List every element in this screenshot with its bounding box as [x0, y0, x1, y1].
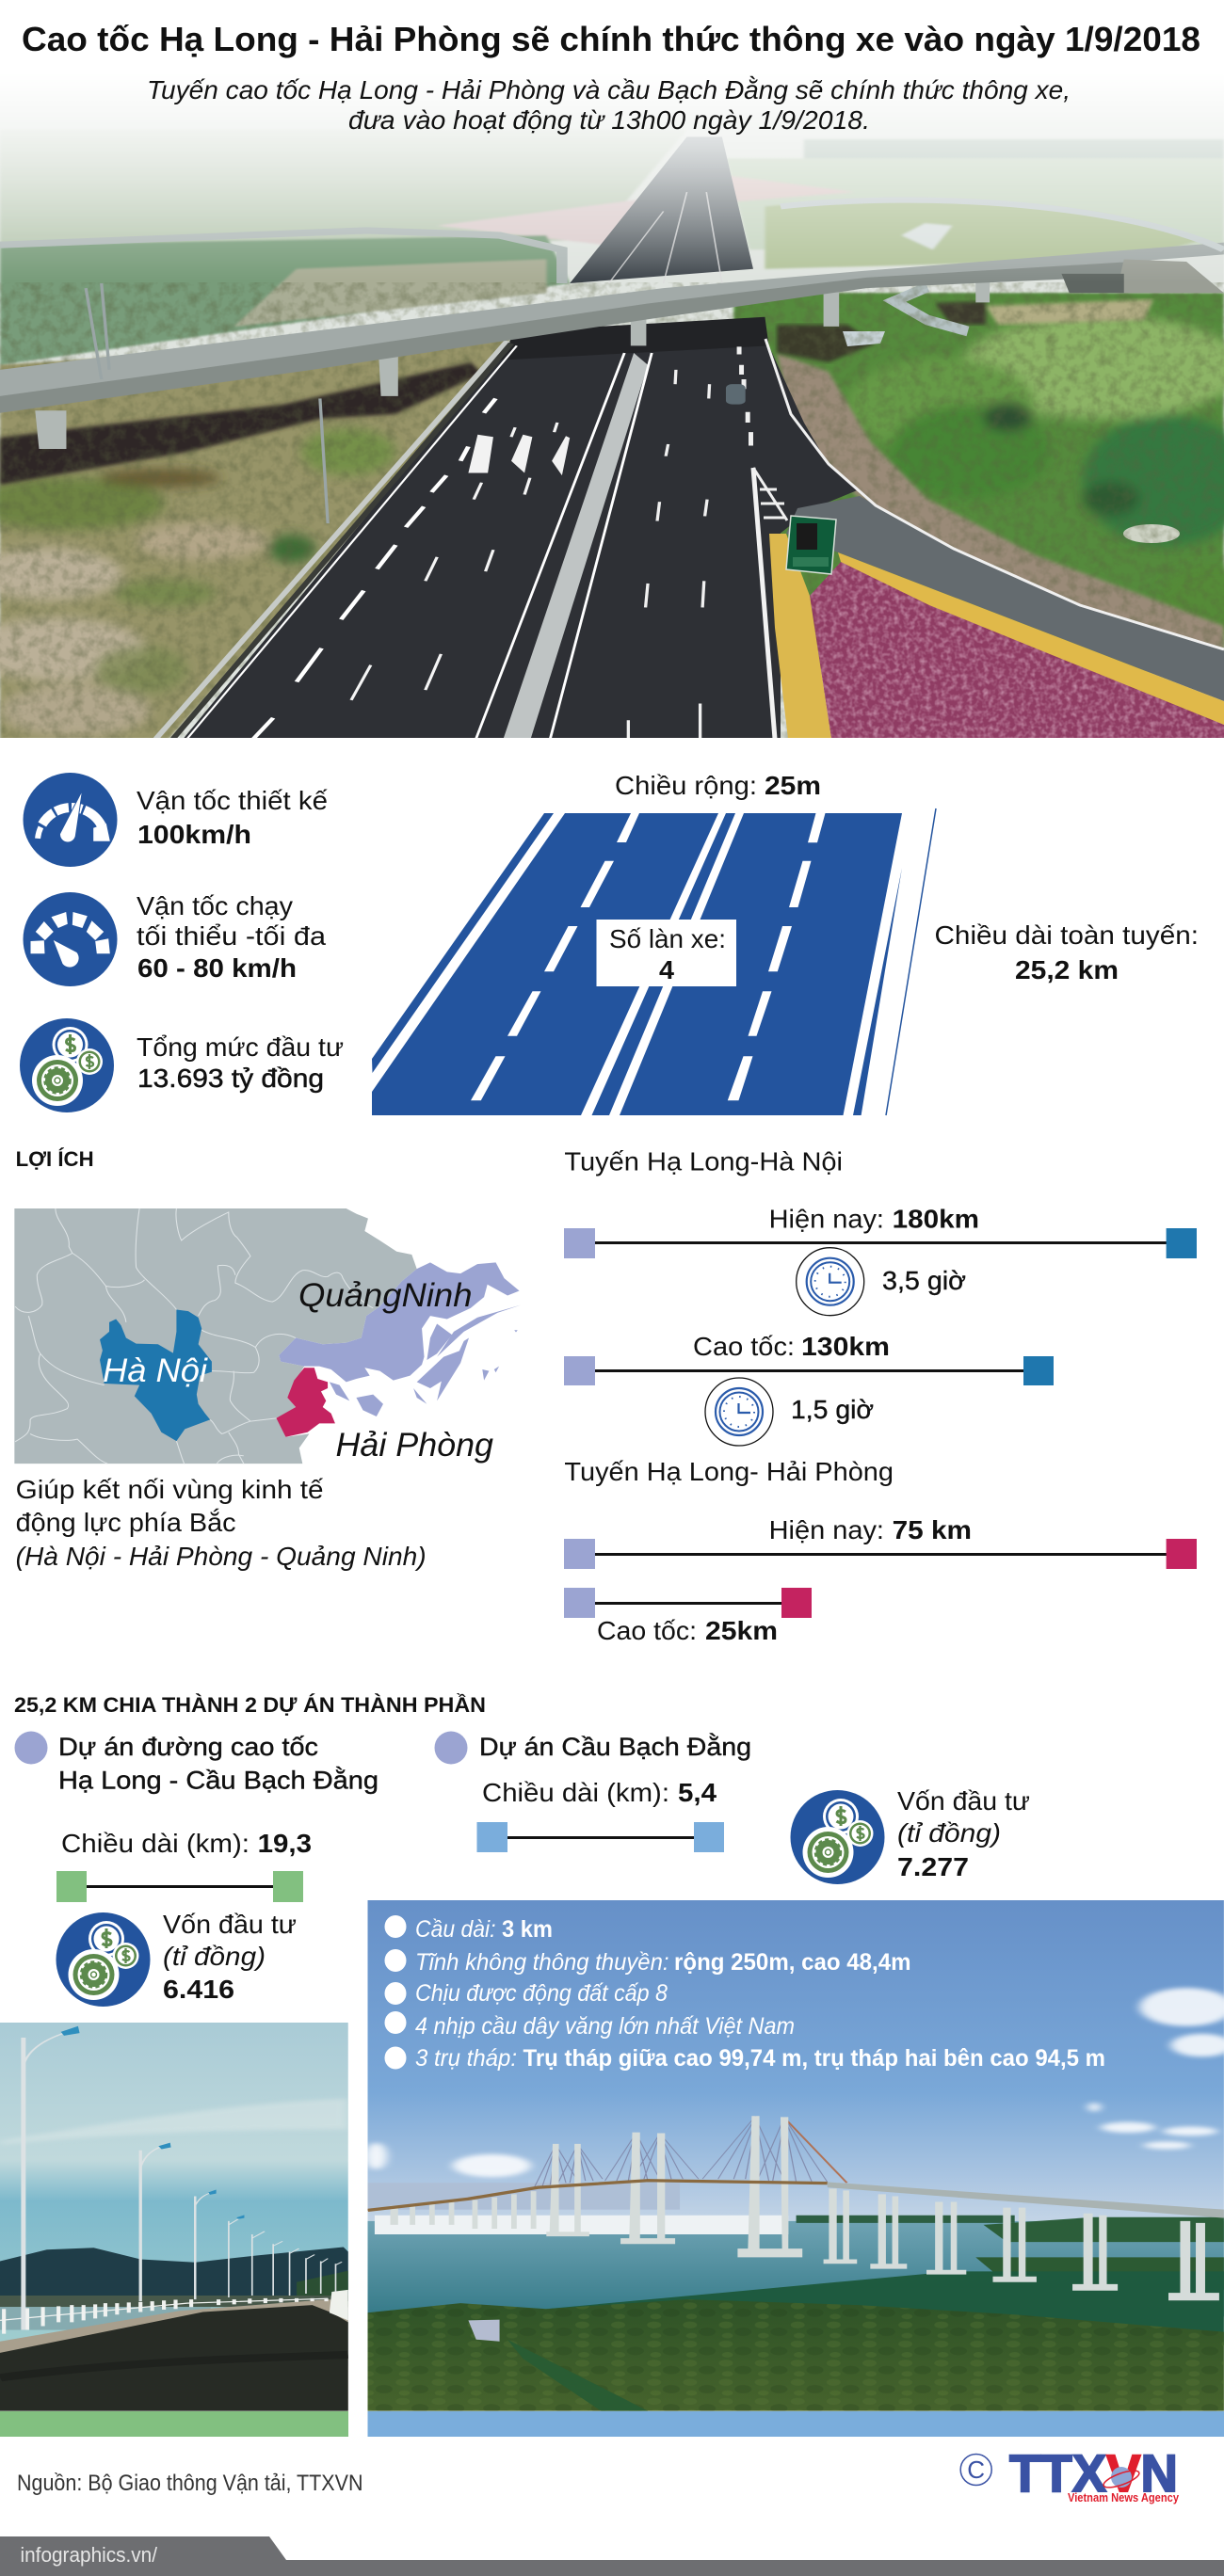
text: operating speed	[137, 891, 326, 983]
distance bar: expressway 130km	[564, 1332, 1054, 1385]
heading: Ha Long - Hai Phong route: Tuyến Hạ Long- Hải Phòng	[564, 1457, 894, 1486]
road width label: 25m	[765, 771, 821, 800]
label: total length: 25,2 km	[1015, 955, 1119, 984]
label: number of lanes: Số làn xe:	[609, 924, 726, 953]
project heading: expressway	[15, 1732, 378, 1795]
project heading: Bach Dang bridge: Dự án Cầu Bạch Đằng	[479, 1732, 751, 1761]
icon: clock 3.5 hours	[797, 1248, 864, 1316]
text: expressway investment	[163, 1910, 297, 2004]
ground colour patches	[0, 282, 1224, 738]
text: operating speed: Vận tốc chạy	[137, 891, 293, 920]
hero photo: highway interchange	[0, 113, 1224, 738]
heading: benefits: LỢI ÍCH	[16, 1147, 94, 1171]
map: northern economic region: Hải Phòng	[335, 1427, 494, 1464]
subtitle: Tuyến cao tốc Hạ Long - Hải Phòng và cầu Bạch Đằng sẽ chính thức thông xe,	[147, 75, 1071, 104]
text: regional connection: Giúp kết nối vùng kinh tế	[16, 1475, 324, 1504]
text: operating speed: tối thiểu -tối đa	[137, 921, 326, 951]
bridge length: Chiều dài (km):	[482, 1778, 669, 1807]
logo: TTXVN: Vietnam News Agency	[1068, 2490, 1180, 2504]
icon: clock 1.5 hours	[705, 1378, 773, 1446]
text: expressway investment: Vốn đầu tư	[163, 1910, 297, 1939]
project heading: Bach Dang bridge	[435, 1732, 751, 1764]
distance bar: expressway 130km: Cao tốc:	[693, 1332, 795, 1361]
project heading: expressway: Dự án đường cao tốc	[58, 1733, 318, 1761]
text: regional connection: động lực phía Bắc	[16, 1508, 236, 1537]
bridge facts list: Tĩnh không thông thuyền:	[415, 1949, 668, 1976]
expressway length	[56, 1829, 312, 1902]
source note: Nguồn: Bộ Giao thông Vận tải, TTXVN	[17, 2471, 363, 2496]
heading: two sub projects: 25,2 KM CHIA THÀNH 2 DỰ ÁN THÀNH PHẦN	[14, 1693, 486, 1717]
bridge facts list: 3 km	[502, 1916, 553, 1943]
photo: expressway with street lamps	[0, 2023, 348, 2411]
bridge facts list	[384, 1915, 1105, 2072]
bridge length	[476, 1778, 724, 1852]
text: bridge investment: 7.277	[897, 1852, 969, 1881]
text: expressway investment: 6.416	[163, 1975, 234, 2004]
icon: bridge investment	[791, 1790, 885, 1884]
logo: TTXVN: TTXVN	[1009, 2443, 1178, 2503]
distance bar: current 75 km: Hiện nay:	[769, 1515, 884, 1544]
icon: speedometer design speed	[23, 773, 117, 867]
map: northern economic region: Hà Nội	[103, 1352, 208, 1389]
icon: speedometer min max speed	[23, 892, 117, 986]
icon: expressway investment	[56, 1912, 151, 2007]
footer bar	[0, 2536, 1224, 2576]
road width label: Chiều rộng:	[615, 771, 757, 800]
text: regional connection	[16, 1475, 427, 1571]
text: design speed	[137, 786, 328, 849]
text: total investment: 13.693 tỷ đồng	[137, 1064, 324, 1093]
bridge facts list: Cầu dài:	[415, 1916, 495, 1943]
text: bridge investment: (tỉ đồng)	[897, 1818, 1001, 1848]
photo: Bach Dang bridge	[365, 1900, 1224, 2411]
distance bar: current 180km: 180km	[893, 1205, 979, 1233]
bridge facts list: Chịu được động đất cấp 8	[415, 1980, 668, 2007]
text: 1.5 hours: 1,5 giờ	[791, 1395, 874, 1424]
title: Cao tốc Hạ Long - Hải Phòng sẽ chính thức thông xe vào ngày 1/9/2018	[22, 20, 1200, 58]
road diagram	[372, 808, 936, 1115]
map: northern economic region	[14, 1208, 521, 1464]
bridge facts list: 3 trụ tháp:	[415, 2045, 517, 2072]
text: design speed: 100km/h	[137, 820, 251, 849]
subtitle	[147, 75, 1071, 135]
expressway length: 19,3	[258, 1829, 312, 1858]
text: total investment: Tổng mức đầu tư	[137, 1032, 344, 1062]
bridge facts list: 4 nhịp cầu dây văng lớn nhất Việt Nam	[415, 2013, 795, 2040]
distance bar: expressway 25km: Cao tốc:	[597, 1616, 697, 1645]
distance bar: expressway 130km: 130km	[801, 1332, 890, 1361]
heading: Ha Long - Ha Noi route: Tuyến Hạ Long-Hà Nội	[564, 1146, 843, 1176]
logo: TTXVN: C	[967, 2456, 985, 2484]
distance bar: expressway 25km: 25km	[705, 1616, 778, 1645]
text: design speed: Vận tốc thiết kế	[137, 786, 328, 815]
map: northern economic region: QuảngNinh	[298, 1277, 473, 1314]
bridge length: 5,4	[678, 1778, 717, 1807]
expressway length: Chiều dài (km):	[61, 1829, 250, 1858]
project heading: expressway: Hạ Long - Cầu Bạch Đằng	[58, 1766, 378, 1795]
bridge facts list: Trụ tháp giữa cao 99,74 m, trụ tháp hai bên cao 94,5 m	[523, 2045, 1105, 2072]
distance bar: current 180km	[564, 1205, 1197, 1258]
footer bar: infographics.vn/	[21, 2543, 158, 2567]
road width label	[615, 771, 821, 800]
label: number of lanes: 4	[659, 955, 674, 984]
distance bar: expressway 25km	[564, 1588, 812, 1645]
text: 3.5 hours: 3,5 giờ	[882, 1266, 966, 1295]
label: number of lanes	[597, 920, 736, 986]
text: expressway investment: (tỉ đồng)	[163, 1942, 266, 1971]
distance bar: current 180km: Hiện nay:	[769, 1205, 884, 1233]
text: bridge investment: Vốn đầu tư	[897, 1786, 1030, 1816]
icon: total investment	[20, 1018, 114, 1112]
band under expressway photo	[0, 2411, 348, 2437]
bridge facts list: rộng 250m, cao 48,4m	[674, 1949, 911, 1976]
text: bridge investment	[897, 1786, 1030, 1881]
text: operating speed: 60 - 80 km/h	[137, 953, 297, 983]
exit ramp and painted island	[753, 339, 1224, 739]
band under bridge photo	[367, 2411, 1224, 2437]
distance bar: current 75 km: 75 km	[893, 1515, 972, 1544]
text: regional connection: (Hà Nội - Hải Phòng - Quảng Ninh)	[16, 1542, 427, 1571]
label: total length	[934, 920, 1199, 984]
highway surface	[156, 136, 859, 739]
subtitle: đưa vào hoạt động từ 13h00 ngày 1/9/2018.	[348, 105, 870, 135]
text: total investment	[137, 1032, 344, 1093]
label: total length: Chiều dài toàn tuyến:	[934, 920, 1199, 950]
flyover bridge	[0, 200, 1224, 523]
distance bar: current 75 km	[564, 1515, 1197, 1569]
